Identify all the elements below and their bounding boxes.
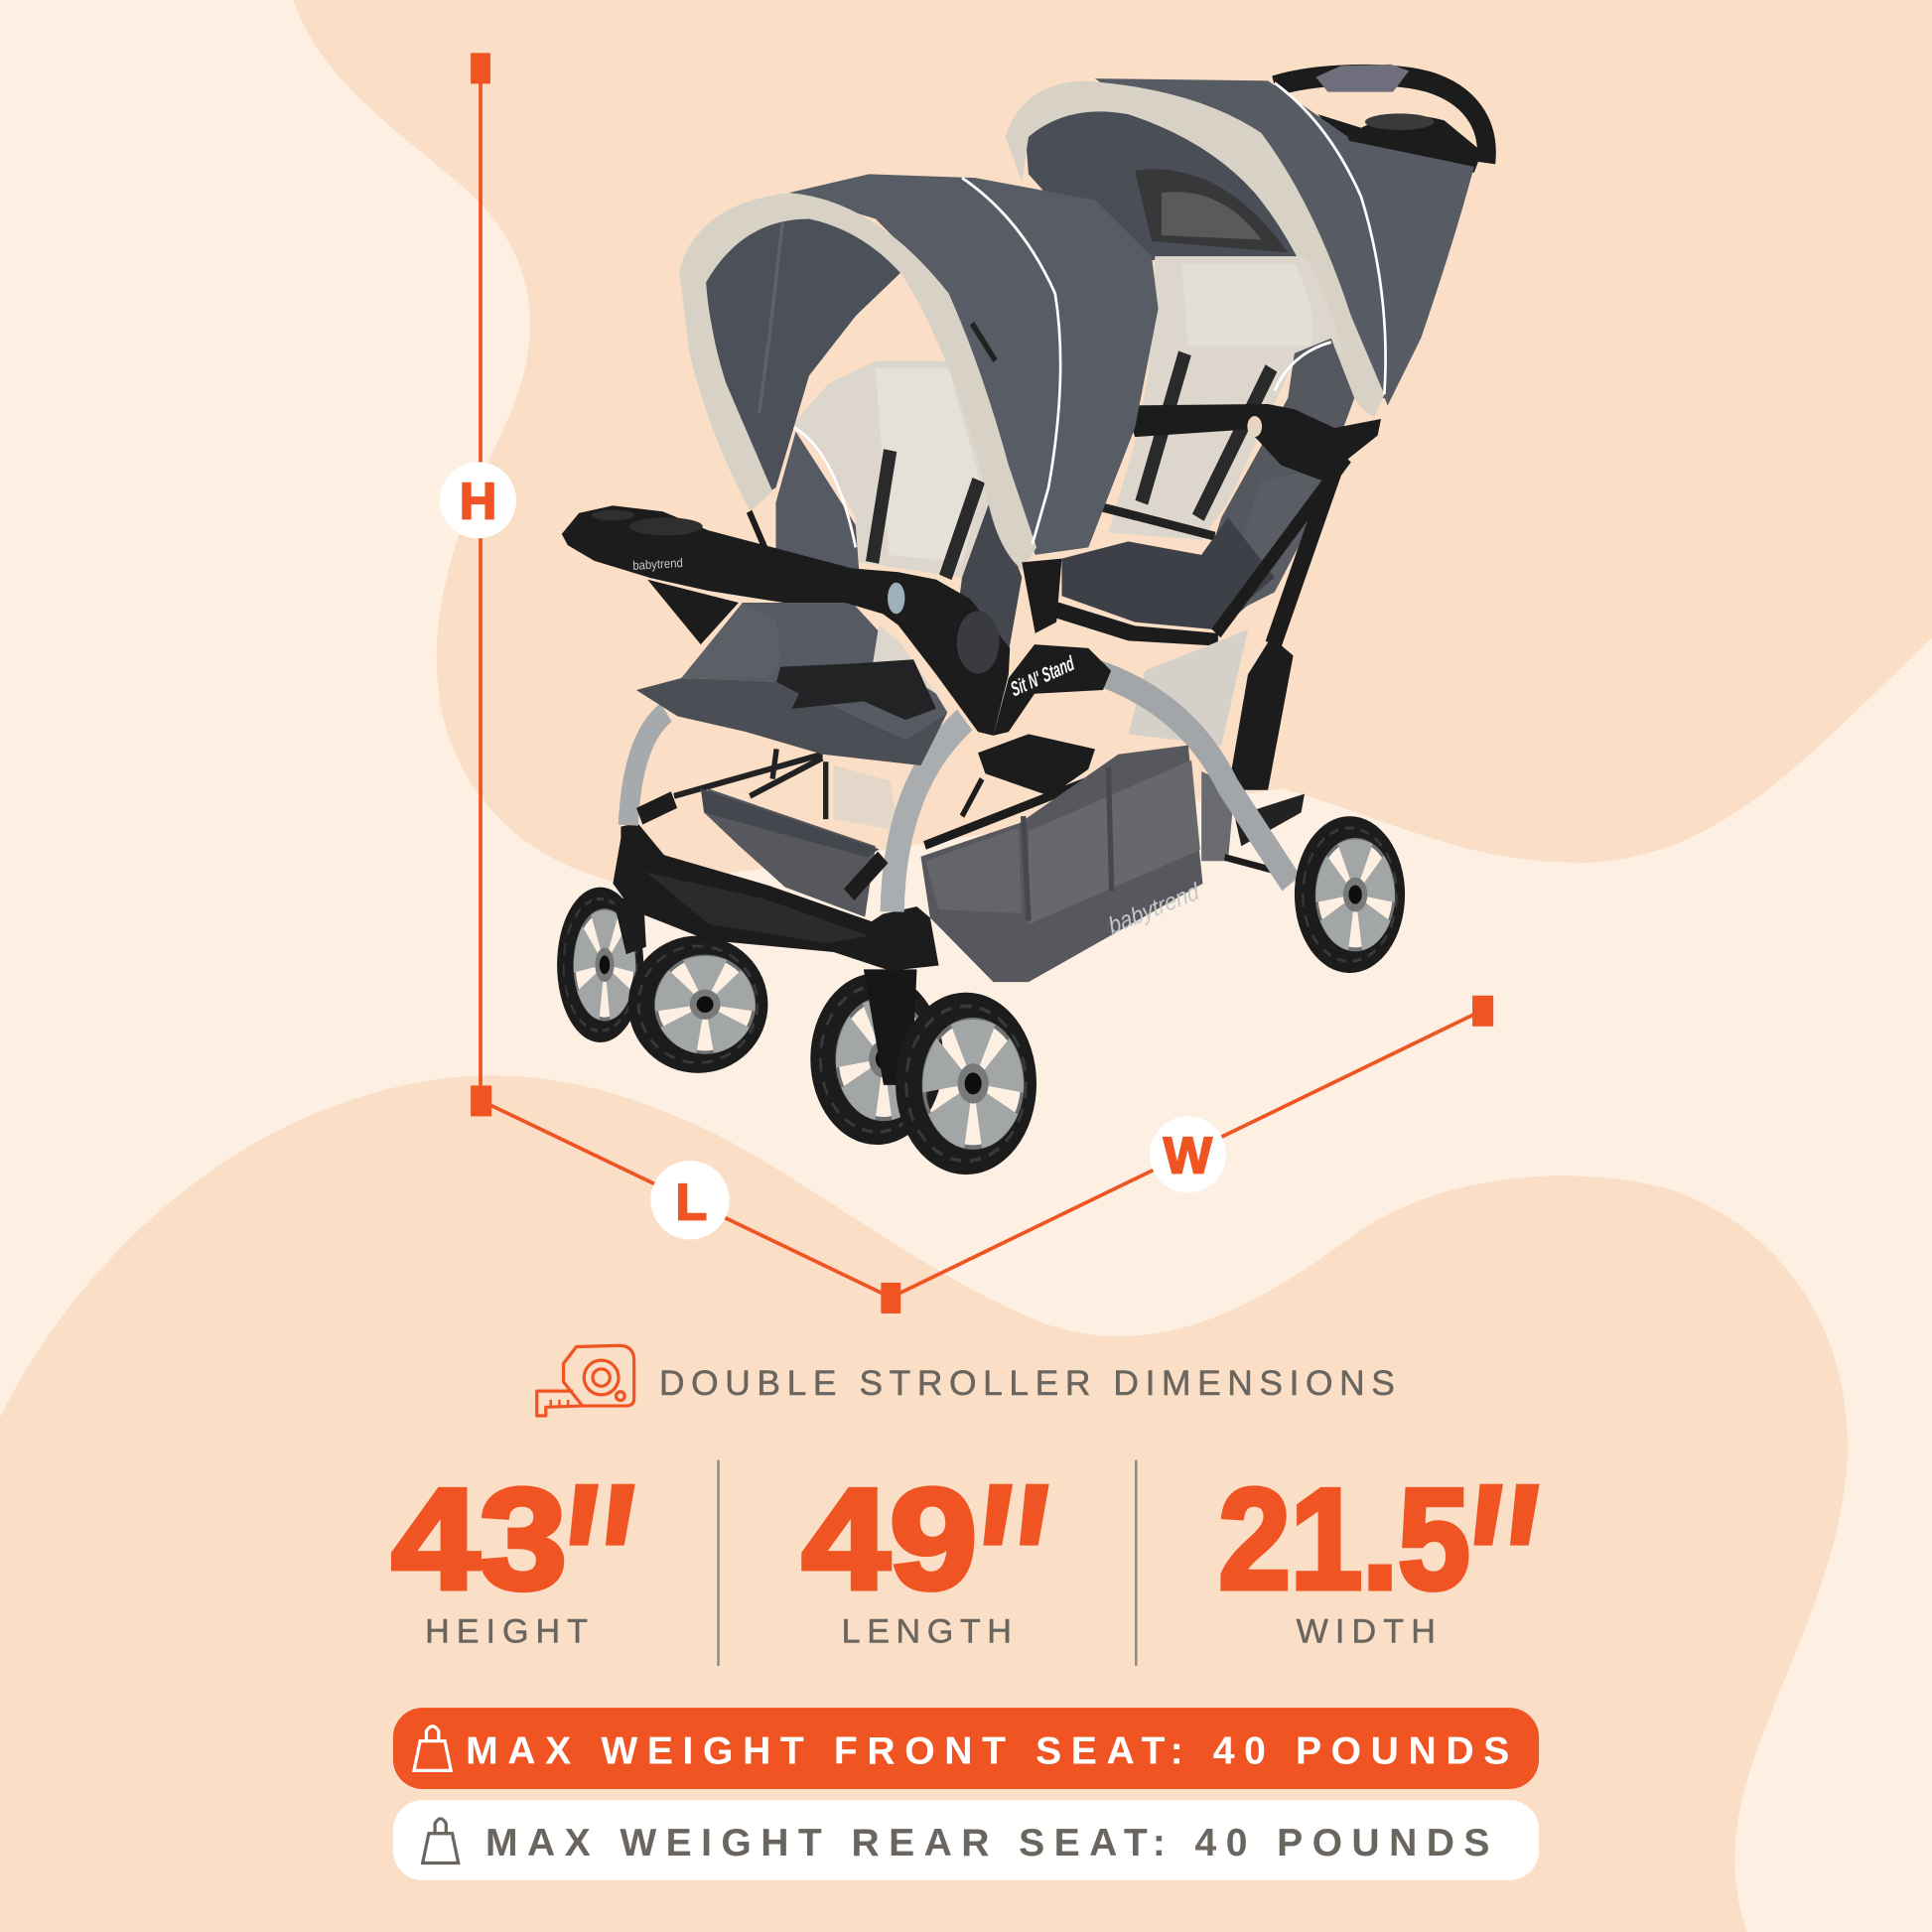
under-seat rails bbox=[674, 749, 826, 819]
H badge: H bbox=[460, 473, 496, 530]
rear seat bbox=[1045, 256, 1354, 646]
front seat pan bbox=[636, 603, 947, 765]
footrest bbox=[613, 823, 939, 971]
dimension line: width bbox=[891, 996, 1493, 1298]
front spring bbox=[864, 969, 916, 1085]
icon: weight bbox=[423, 1819, 459, 1863]
stat: height: " bbox=[551, 1431, 635, 1707]
background blob: top bbox=[293, 0, 1932, 888]
callout: rear seat weight: MAX WEIGHT REAR SEAT: 40 POUNDS bbox=[485, 1822, 1489, 1864]
callout: front seat weight: MAX WEIGHT FRONT SEAT: 40 POUNDS bbox=[466, 1730, 1509, 1773]
rear seat panel seen through frame bbox=[834, 765, 898, 830]
stat: height bbox=[392, 1431, 635, 1707]
callout: front seat weight bbox=[393, 1708, 1539, 1789]
dimension line: height bbox=[440, 53, 516, 1116]
background blob: bottom bbox=[0, 1075, 1848, 1932]
rear canopy bbox=[1006, 78, 1474, 417]
icon: weight bbox=[414, 1726, 451, 1770]
right frame arch bbox=[893, 720, 965, 911]
stat: width bbox=[1218, 1431, 1540, 1707]
front tray bbox=[562, 505, 1010, 736]
divider bbox=[718, 1460, 720, 1666]
icon: tape measure bbox=[537, 1345, 634, 1416]
back fork bbox=[613, 898, 646, 954]
stat: width: " bbox=[1455, 1431, 1540, 1707]
rear handle and tray bbox=[1275, 65, 1486, 173]
H badge bbox=[440, 462, 516, 538]
footrest clasps bbox=[639, 800, 883, 895]
Sit N' Stand logo: Sit N' Stand bbox=[1008, 652, 1078, 702]
stat: length: 49 bbox=[802, 1459, 977, 1619]
front right wheel bbox=[896, 993, 1036, 1174]
rear tray bar bbox=[1125, 404, 1381, 481]
basket logo: babytrend bbox=[1105, 877, 1203, 939]
stat: height: 43 bbox=[392, 1459, 567, 1619]
divider bbox=[1135, 1460, 1137, 1666]
W badge bbox=[1150, 1116, 1226, 1192]
canopy joint bbox=[1022, 559, 1061, 633]
L badge: L bbox=[675, 1174, 707, 1232]
front left wheel bbox=[810, 973, 943, 1145]
front canopy bbox=[679, 174, 1159, 570]
stroller photo illustration bbox=[557, 65, 1486, 1174]
back left wheel bbox=[557, 888, 643, 1042]
W badge: W bbox=[1164, 1127, 1213, 1184]
dimension line: length bbox=[481, 1100, 900, 1313]
under-seat black parts bbox=[925, 734, 1095, 845]
stat: length: LENGTH bbox=[842, 1612, 1012, 1650]
rear frame bbox=[1098, 458, 1346, 884]
callout: rear seat weight bbox=[393, 1800, 1539, 1880]
storage basket bbox=[920, 746, 1203, 982]
stat: length bbox=[802, 1431, 1049, 1707]
stat: length: " bbox=[965, 1431, 1049, 1707]
front seat back bbox=[775, 360, 1022, 652]
heading: DOUBLE STROLLER DIMENSIONS bbox=[659, 1364, 1395, 1403]
tray logo: babytrend bbox=[632, 555, 683, 573]
stat: height: HEIGHT bbox=[425, 1612, 588, 1650]
front brand bracket bbox=[993, 644, 1111, 736]
stat: width: WIDTH bbox=[1297, 1612, 1436, 1650]
left frame arch bbox=[628, 713, 666, 825]
back right wheel bbox=[628, 935, 767, 1073]
footrest fabric bbox=[701, 788, 879, 917]
L badge bbox=[650, 1161, 730, 1240]
stat: width: 21.5 bbox=[1218, 1459, 1470, 1619]
rear wheel bbox=[1295, 816, 1405, 973]
